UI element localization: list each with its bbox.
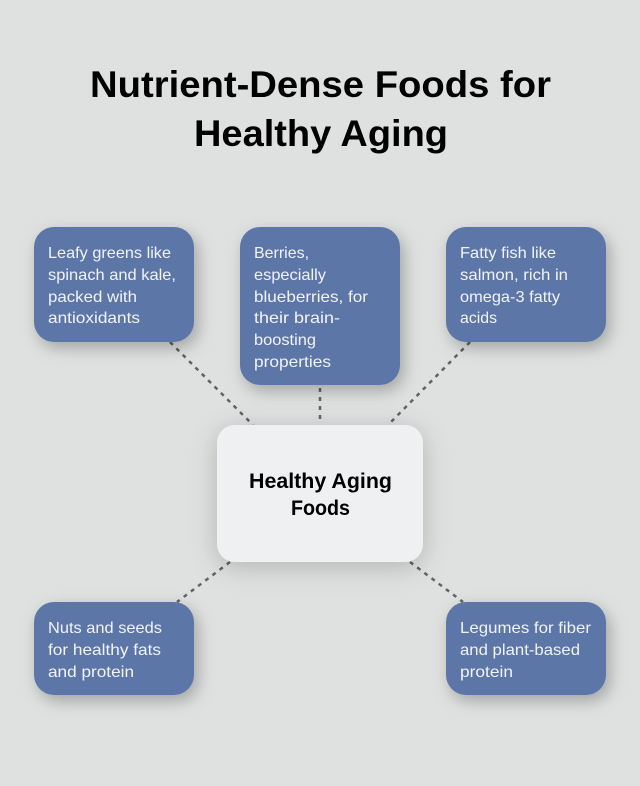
title: Healthy Aging (194, 113, 448, 154)
panel: legumes (446, 602, 606, 695)
panel: berries: blueberries, for (254, 289, 369, 306)
panel: legumes: protein (460, 664, 513, 681)
connector lines (170, 342, 470, 602)
panel: legumes: Legumes for fiber (460, 620, 592, 637)
panel: berries: their brain- (254, 310, 340, 327)
panel: center topic: Healthy Aging (249, 470, 392, 493)
panel: berries (240, 227, 400, 385)
panel: berries: boosting (254, 332, 316, 349)
panel: berries: Berries, (254, 245, 309, 262)
panel: fatty fish: Fatty fish like (460, 245, 556, 262)
panel: berries: especially (254, 267, 326, 284)
panel: leafy greens: packed with (48, 289, 137, 306)
panel: berries: properties (254, 354, 331, 371)
panel: fatty fish (446, 227, 606, 342)
panel: fatty fish: omega-3 fatty (460, 289, 560, 306)
panel: leafy greens: Leafy greens like (48, 245, 171, 262)
panel: legumes: and plant-based (460, 642, 580, 659)
panel: center topic: Foods (291, 497, 350, 520)
panel: nuts and seeds: and protein (48, 664, 134, 681)
panel: fatty fish: acids (460, 310, 497, 327)
panel: leafy greens: spinach and kale, (48, 267, 176, 284)
panel: leafy greens: antioxidants (48, 310, 140, 327)
title: Nutrient-Dense Foods for (90, 64, 551, 105)
panel: leafy greens (34, 227, 194, 342)
title (90, 64, 551, 154)
panel: nuts and seeds: for healthy fats (48, 642, 161, 659)
panel: fatty fish: salmon, rich in (460, 267, 568, 284)
panel: nuts and seeds (34, 602, 194, 695)
panel: nuts and seeds: Nuts and seeds (48, 620, 162, 637)
panel: center topic (217, 425, 423, 562)
